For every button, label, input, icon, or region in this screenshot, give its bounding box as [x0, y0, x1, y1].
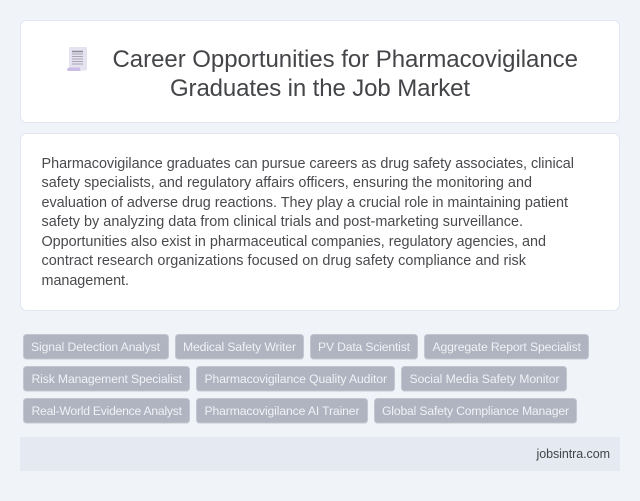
- panel: header: [20, 20, 620, 122]
- tag: Pharmacovigilance AI Trainer: Pharmacovigilance AI Trainer: [204, 404, 360, 418]
- text block: description paragraph: management.: [42, 273, 129, 289]
- panel: description: [20, 134, 620, 310]
- tag: Risk Management Specialist: Risk Management Specialist: [32, 372, 183, 386]
- tag: Global Safety Compliance Manager: Global Safety Compliance Manager: [382, 404, 569, 418]
- tag list: [24, 334, 588, 423]
- title: [112, 46, 578, 102]
- text block: description paragraph: safety specialists, and regulatory affairs officers, ensuring the monitoring and: [42, 175, 532, 191]
- tag: Medical Safety Writer: [176, 334, 304, 359]
- tag: Social Media Safety Monitor: Social Media Safety Monitor: [410, 372, 560, 386]
- tag: Aggregate Report Specialist: [424, 334, 588, 359]
- text block: description paragraph: contract research organizations focused on drug safety compliance and risk: [42, 253, 527, 269]
- tag: Aggregate Report Specialist: Aggregate Report Specialist: [432, 340, 582, 354]
- tag: Pharmacovigilance Quality Auditor: [196, 366, 394, 391]
- footer: jobsintra.com: [536, 447, 610, 461]
- tag: Real-World Evidence Analyst: Real-World Evidence Analyst: [32, 404, 183, 418]
- title: Career Opportunities for Pharmacovigilance: [112, 46, 578, 73]
- tag: Pharmacovigilance AI Trainer: [196, 398, 368, 423]
- text block: description paragraph: safety by analyzing data from clinical trials and post-marketing surveillance.: [42, 214, 523, 230]
- text block: description paragraph: evaluation of adverse drug reactions. They play a crucial role in maintaining patient: [42, 195, 568, 211]
- text block: description paragraph: Pharmacovigilance graduates can pursue careers as drug safety associates, clinical: [42, 156, 574, 172]
- tag: Global Safety Compliance Manager: [374, 398, 576, 423]
- tag: Signal Detection Analyst: [24, 334, 168, 359]
- tag: Risk Management Specialist: [24, 366, 190, 391]
- tag: Real-World Evidence Analyst: [24, 398, 190, 423]
- tag: Social Media Safety Monitor: [402, 366, 566, 391]
- title: Graduates in the Job Market: [170, 75, 470, 102]
- tag: Medical Safety Writer: Medical Safety Writer: [183, 340, 296, 354]
- tag: PV Data Scientist: [310, 334, 418, 359]
- icon: document scroll: [67, 47, 87, 71]
- text block: description paragraph: [42, 156, 574, 289]
- tag: Pharmacovigilance Quality Auditor: Pharmacovigilance Quality Auditor: [204, 372, 387, 386]
- text block: description paragraph: Opportunities also exist in pharmaceutical companies, regulatory agencies, and: [42, 234, 546, 250]
- tag: Signal Detection Analyst: Signal Detection Analyst: [31, 340, 161, 354]
- footer: [20, 437, 620, 471]
- tag: PV Data Scientist: PV Data Scientist: [318, 340, 411, 354]
